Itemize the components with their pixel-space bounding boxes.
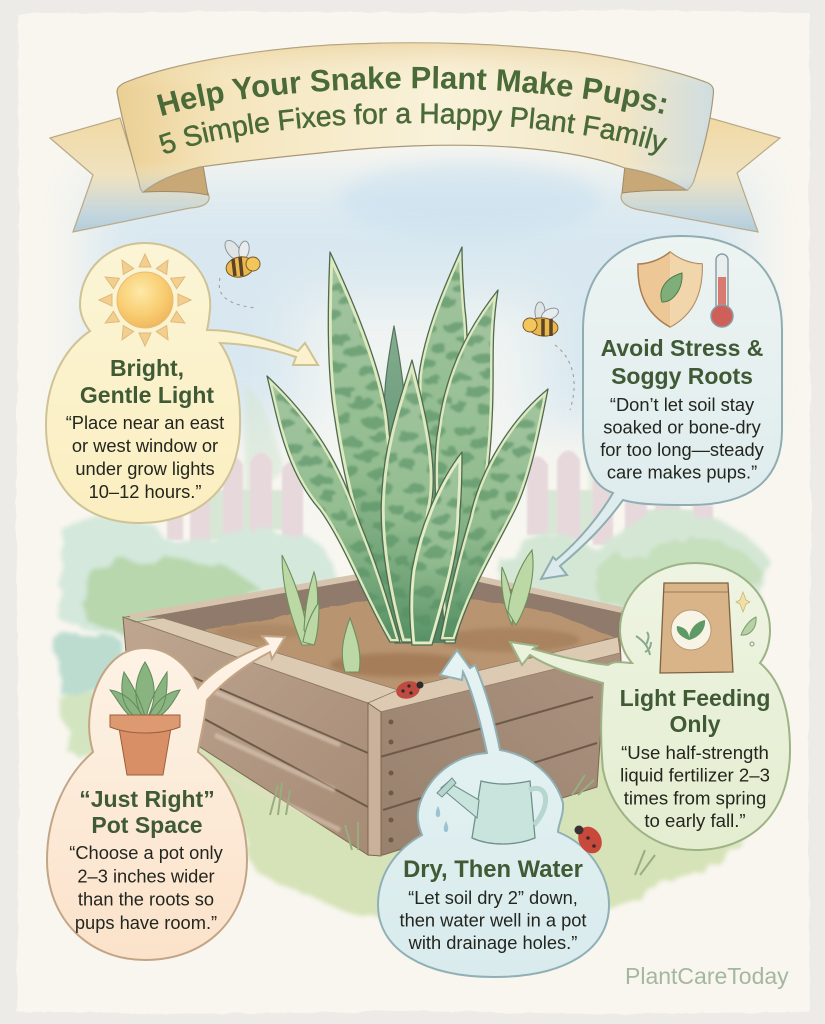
bubble with pointer [541, 236, 782, 579]
right wall [368, 640, 622, 855]
far left leaf [267, 376, 400, 642]
tall left leaf [328, 252, 412, 643]
heading: “Just Right” [79, 786, 215, 812]
heading: Only [669, 711, 721, 737]
body: for too long—steady [600, 439, 765, 460]
fence [167, 450, 713, 552]
body: with drainage holes.” [408, 932, 577, 953]
banner: 5 Simple Fixes for a Happy Plant Family [159, 103, 668, 156]
heading: Bright, [110, 355, 184, 381]
icon: sun [99, 254, 191, 346]
watercolor background scene [55, 162, 770, 927]
icon: fertilizer bag [636, 583, 756, 673]
right fold [622, 165, 687, 193]
left fold [143, 165, 208, 195]
banner [48, 42, 782, 233]
bubble with arrow [46, 243, 318, 523]
body: liquid fertilizer 2–3 [620, 765, 770, 786]
pups [282, 550, 533, 672]
bee left [219, 238, 260, 308]
front leaf [410, 452, 462, 645]
bubble with arrow [47, 636, 285, 960]
body: or west window or [72, 435, 218, 456]
body: “Place near an east [66, 412, 224, 433]
main ribbon [117, 43, 713, 192]
left rim [123, 617, 398, 703]
title line 1 [150, 88, 676, 120]
body: “Don’t let soil stay [610, 394, 754, 415]
center leaf [381, 360, 433, 642]
base shadow [365, 570, 470, 643]
back rim [130, 566, 622, 617]
body: times from spring [624, 787, 766, 808]
callout: dry then water [378, 650, 609, 977]
bee right [523, 302, 574, 410]
soil shading [215, 624, 580, 677]
ladybug on bed [394, 679, 424, 701]
far right leaf [440, 389, 548, 640]
body: 10–12 hours.” [89, 481, 201, 502]
title line 2 [158, 123, 668, 157]
back walls [123, 565, 622, 692]
rear right leaf [418, 246, 468, 502]
body: to early fall.” [644, 810, 746, 831]
heading: Pot Space [91, 812, 203, 838]
body: pups have room.” [75, 912, 217, 933]
icon: thermometer [711, 254, 733, 327]
leaf [661, 273, 682, 302]
soil [200, 590, 615, 692]
right rim [368, 637, 620, 712]
heading: Gentle Light [80, 382, 214, 408]
left ribbon tail [50, 118, 209, 232]
bushes [55, 513, 770, 927]
icon: shield [638, 252, 702, 327]
body: then water well in a pot [400, 910, 586, 930]
right ribbon tail [621, 118, 780, 232]
banner: Help Your Snake Plant Make Pups: [156, 66, 666, 116]
body: soaked or bone-dry [603, 416, 762, 438]
body: “Choose a pot only [69, 842, 223, 863]
body: “Let soil dry 2” down, [408, 887, 578, 908]
heading: Dry, Then Water [403, 856, 583, 883]
callout: pot space [47, 636, 285, 960]
ladybug [573, 822, 607, 858]
body: care makes pups.” [607, 462, 757, 482]
right leaf [435, 290, 498, 643]
body: under grow lights [75, 458, 215, 479]
heading: Soggy Roots [611, 363, 753, 389]
bubble with arrow [510, 563, 790, 850]
body: “Use half-strength [621, 742, 769, 763]
icon: watering can [436, 778, 546, 844]
callout: bright gentle light [46, 243, 318, 523]
back small leaf [384, 326, 407, 480]
ribbon shading [117, 43, 713, 192]
raised garden bed [123, 565, 655, 875]
snake plant [267, 247, 548, 645]
bubble with arrow [378, 650, 609, 977]
heading: Avoid Stress & [601, 335, 763, 361]
callout: light feeding [510, 563, 790, 850]
icon: potted plant [110, 662, 180, 775]
heading: Light Feeding [620, 685, 770, 711]
grass tufts [270, 775, 655, 875]
body: than the roots so [78, 889, 214, 910]
brand watermark: PlantCareToday [625, 963, 789, 989]
callout: avoid stress [541, 236, 782, 579]
body: 2–3 inches wider [77, 865, 215, 886]
left wall [123, 617, 368, 855]
